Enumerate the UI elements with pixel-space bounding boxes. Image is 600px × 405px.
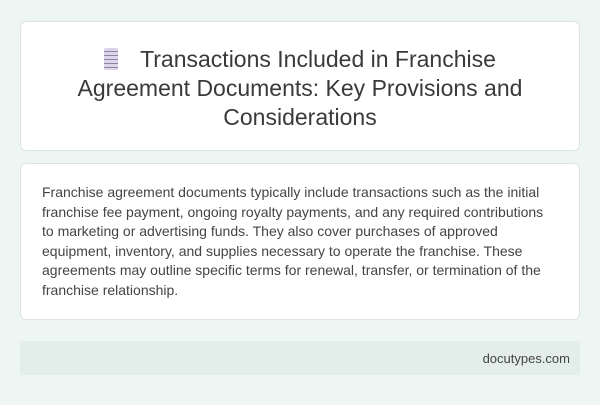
title: Considerations [223, 104, 377, 130]
text block: franchise relationship. [42, 282, 178, 298]
panel: header [20, 21, 580, 151]
text block: equipment, inventory, and supplies necessary to operate the franchise. These [42, 242, 522, 258]
panel: description [20, 163, 580, 320]
footer [20, 341, 580, 375]
text block [42, 184, 543, 298]
text block: franchise fee payment, ongoing royalty payments, and any required contributions [42, 204, 543, 220]
text block: Franchise agreement documents typically include transactions such as the initial [42, 184, 539, 200]
icon: receipt [104, 48, 118, 70]
text block: to marketing or advertising funds. They also cover purchases of approved [42, 223, 498, 239]
title: Transactions Included in Franchise [140, 46, 496, 72]
text block: agreements may outline specific terms for renewal, transfer, or termination of the [42, 262, 541, 278]
title: Agreement Documents: Key Provisions and [78, 75, 522, 101]
title [78, 46, 522, 130]
footer text: docutypes.com [483, 351, 570, 366]
